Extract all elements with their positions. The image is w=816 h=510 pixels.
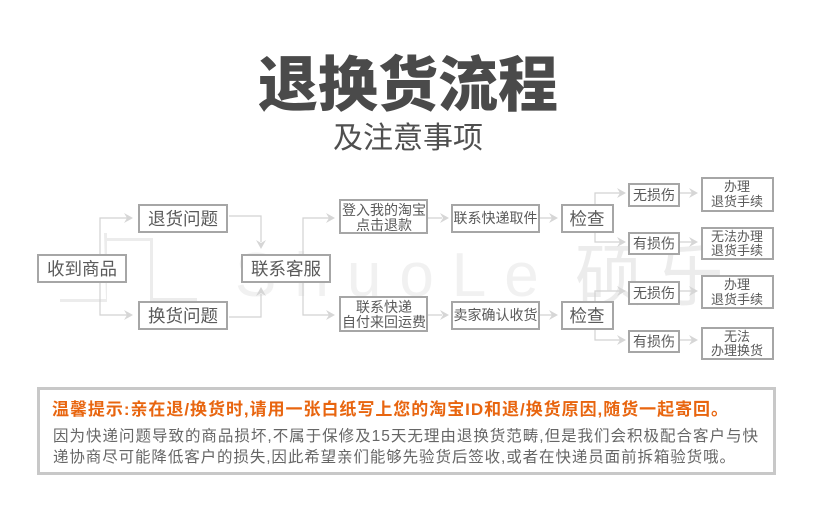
box: 收到商品 bbox=[38, 255, 126, 282]
box: 无法办理换货 bbox=[702, 328, 773, 359]
title: 退换货流程 bbox=[258, 37, 558, 124]
box: 卖家确认收货: 卖家确认收货 bbox=[454, 307, 538, 323]
subtitle: 及注意事项 bbox=[333, 113, 483, 157]
box: 联系快递取件: 联系快递取件 bbox=[454, 210, 538, 226]
box: 无法办理退货手续: 退货手续 bbox=[711, 243, 763, 258]
notice body bbox=[53, 427, 758, 466]
box: 有损伤 1: 有损伤 bbox=[633, 236, 675, 252]
box: 办理退货手续 1: 退货手续 bbox=[711, 194, 763, 209]
box: 登入我的淘宝: 点击退款 bbox=[356, 217, 412, 233]
box: 办理退货手续 1 bbox=[702, 178, 773, 211]
panel: notice bbox=[38, 388, 774, 474]
box: 无法办理换货: 无法 bbox=[724, 329, 750, 344]
box: 检查 bottom: 检查 bbox=[570, 306, 604, 326]
box: 无法办理退货手续 bbox=[702, 228, 773, 259]
box: 登入我的淘宝 bbox=[340, 200, 427, 233]
box: 联系快递: 自付来回运费 bbox=[342, 314, 426, 330]
box: 收到商品: 收到商品 bbox=[47, 259, 117, 279]
box: 无损伤 2: 无损伤 bbox=[633, 285, 675, 301]
box: 卖家确认收货 bbox=[452, 302, 539, 329]
box: 联系快递取件 bbox=[452, 205, 539, 232]
box: 联系客服 bbox=[242, 255, 330, 282]
box: 换货问题: 换货问题 bbox=[148, 306, 218, 326]
box: 检查 top: 检查 bbox=[570, 209, 604, 229]
box: 联系快递 bbox=[340, 297, 427, 331]
box: 联系客服: 联系客服 bbox=[251, 259, 321, 279]
box: 检查 bottom bbox=[562, 302, 613, 329]
box: 检查 top bbox=[562, 205, 613, 232]
box: 办理退货手续 2: 退货手续 bbox=[711, 292, 763, 307]
box: 有损伤 1 bbox=[629, 233, 679, 254]
box: 办理退货手续 2: 办理 bbox=[724, 277, 750, 292]
box: 无损伤 2 bbox=[629, 282, 679, 304]
watermark: 硕乐 bbox=[575, 221, 739, 320]
box: 联系快递: 联系快递 bbox=[356, 299, 412, 315]
box: 退货问题: 退货问题 bbox=[148, 209, 218, 229]
box: 换货问题 bbox=[139, 302, 227, 329]
box: 无法办理换货: 办理换货 bbox=[711, 343, 763, 358]
notice body: 因为快递问题导致的商品损坏,不属于保修及15天无理由退换货范畴,但是我们会积极配合客户与快 bbox=[53, 427, 758, 445]
notice heading: 温馨提示:亲在退/换货时,请用一张白纸写上您的淘宝ID和退/换货原因,随货一起寄回。 bbox=[52, 399, 728, 419]
box: 退货问题 bbox=[139, 205, 227, 232]
watermark bbox=[60, 221, 739, 320]
watermark: ShuoLe bbox=[235, 241, 557, 310]
box: 有损伤 2: 有损伤 bbox=[633, 334, 675, 350]
box: 办理退货手续 1: 办理 bbox=[724, 179, 750, 194]
box: 登入我的淘宝: 登入我的淘宝 bbox=[342, 202, 426, 218]
notice body: 递协商尽可能降低客户的损失,因此希望亲们能够先验货后签收,或者在快递员面前拆箱验货哦。 bbox=[53, 448, 735, 466]
box: 无法办理退货手续: 无法办理 bbox=[711, 229, 763, 244]
box: 无损伤 1: 无损伤 bbox=[633, 187, 675, 203]
box: 无损伤 1 bbox=[629, 184, 679, 206]
box: 办理退货手续 2 bbox=[702, 276, 773, 308]
connector arrows bbox=[100, 188, 698, 345]
box: 有损伤 2 bbox=[629, 331, 679, 352]
